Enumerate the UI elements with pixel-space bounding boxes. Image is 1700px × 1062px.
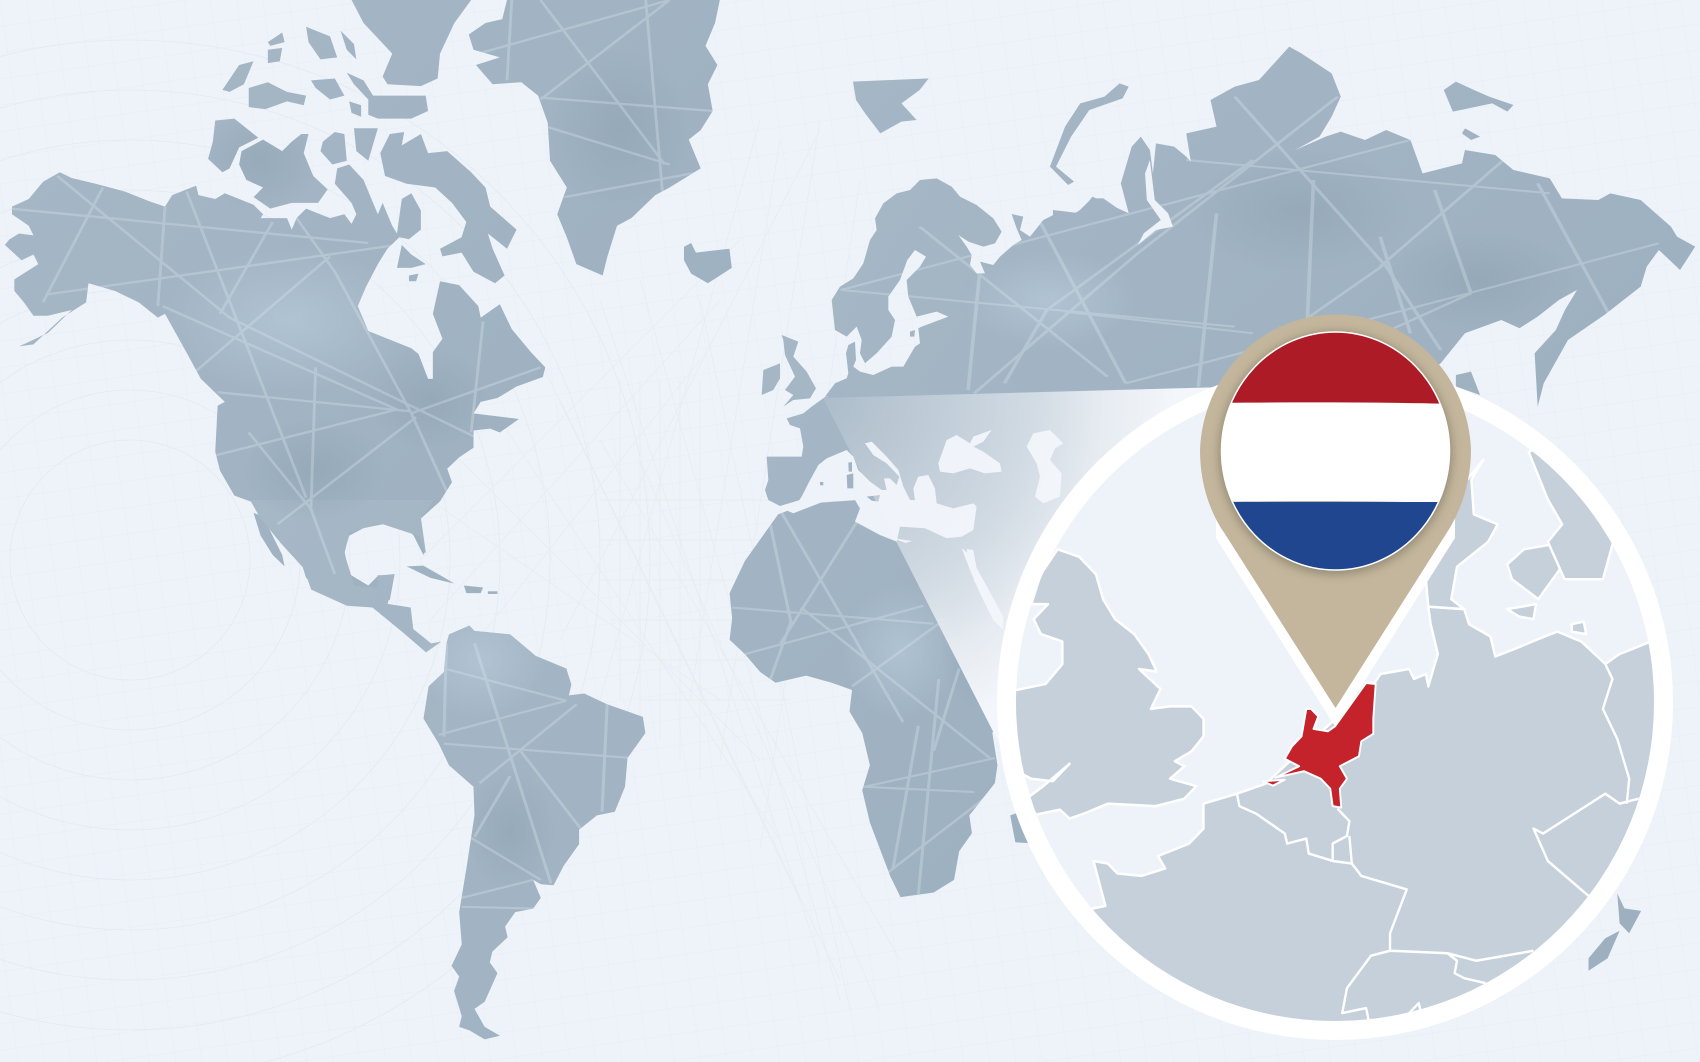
Denmark Jutland xyxy=(1426,460,1498,609)
Black Sea xyxy=(938,430,1002,473)
pin white outline xyxy=(1216,500,1455,727)
magnifying beam xyxy=(823,387,1335,751)
pin inner shadow xyxy=(1220,332,1452,574)
Africa and Madagascar xyxy=(730,500,1066,897)
Sweden xyxy=(1528,450,1613,580)
magnifying circle xyxy=(997,364,1700,1062)
Red Sea xyxy=(962,548,1003,630)
magnified map of western Europe xyxy=(1016,450,1654,1021)
Mediterranean and Adriatic xyxy=(782,442,977,542)
Greenland and Iceland xyxy=(469,0,732,283)
seas cut into the land xyxy=(782,430,1063,630)
red stripe xyxy=(1232,332,1440,404)
blue stripe xyxy=(1233,502,1438,570)
Scandinavia and north-east Europe xyxy=(825,178,1120,407)
Danish islands xyxy=(1507,544,1560,599)
Netherlands in red xyxy=(1263,683,1376,808)
Great Britain xyxy=(998,549,1203,819)
flag rim xyxy=(1222,332,1450,570)
Western, southern Europe and the Middle East xyxy=(762,335,1140,660)
Australia and New Zealand xyxy=(1589,893,1641,971)
pin body xyxy=(1200,314,1471,708)
flag of the Netherlands xyxy=(1222,332,1449,570)
white stripe xyxy=(1215,402,1455,503)
Mediterranean islands xyxy=(820,462,880,502)
North America xyxy=(5,0,545,600)
Caspian Sea xyxy=(1027,430,1063,503)
magnified water xyxy=(1016,383,1654,1021)
national borders xyxy=(1237,664,1639,1020)
Gulf of Ob xyxy=(1138,160,1173,245)
map pin xyxy=(1200,314,1471,727)
Continental Europe xyxy=(1092,608,1654,1021)
Central and South America xyxy=(250,500,645,1039)
white ring xyxy=(997,364,1673,1040)
Russia and northern Asia xyxy=(853,47,1695,433)
